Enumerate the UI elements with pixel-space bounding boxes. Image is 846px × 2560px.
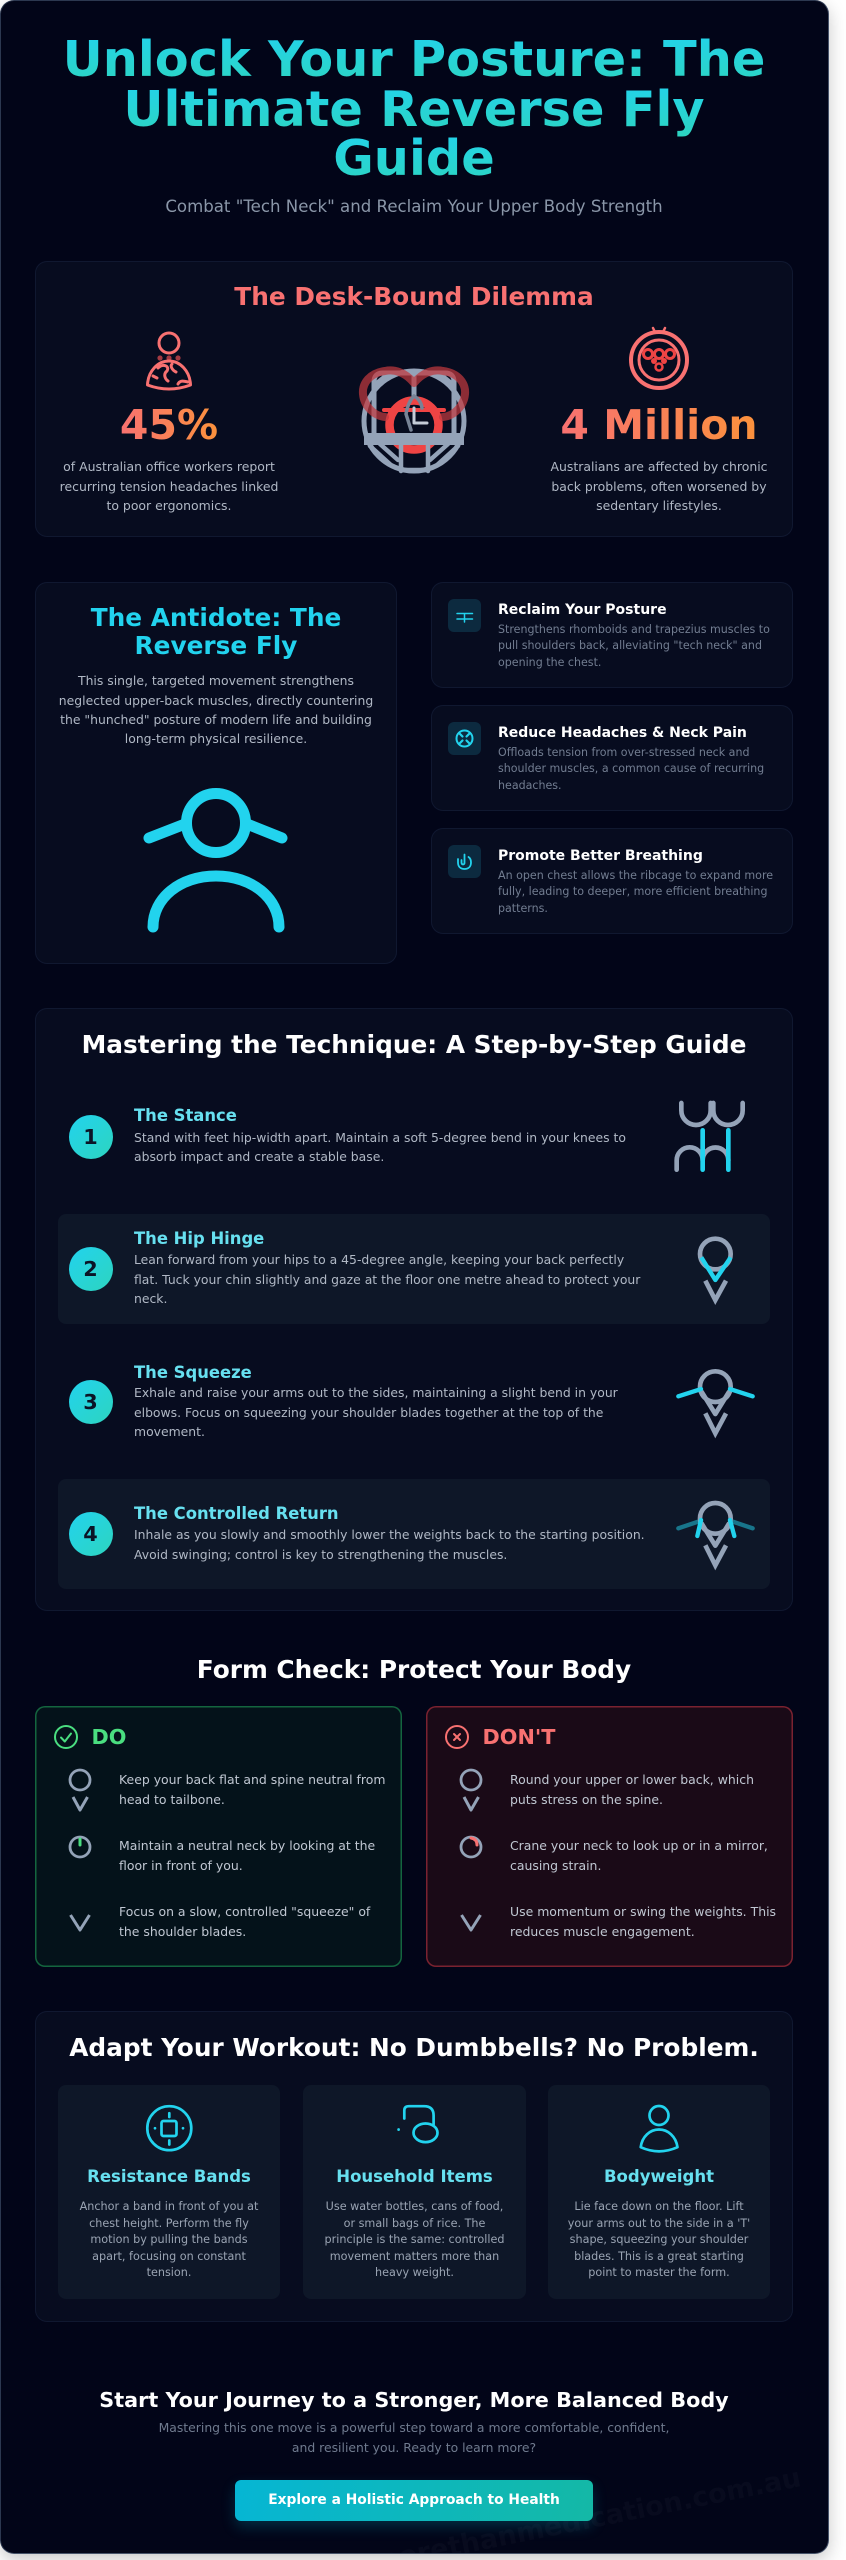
text: headaches: headaches.	[498, 779, 562, 792]
text: breathing: patterns.	[498, 902, 548, 915]
text	[548, 2199, 770, 2282]
number 3	[68, 1380, 112, 1424]
step text 3: movement.	[134, 1424, 205, 1439]
text: Lie face down on the floor. Lift	[574, 2200, 744, 2213]
text: reclaim	[498, 623, 770, 669]
number 3: 3	[83, 1390, 98, 1414]
text	[510, 1902, 776, 1941]
text: Use momentum or swing the weights. This	[510, 1904, 776, 1919]
step text 2: flat. Tuck your chin slightly and gaze at the floor one metre ahead to protect your	[134, 1272, 640, 1287]
title: Household Items	[336, 2167, 493, 2186]
icon: household bottle	[385, 2100, 447, 2160]
text: antidote description: This single, targeted movement strengthens	[78, 673, 354, 688]
number 4: 4	[83, 1522, 98, 1546]
benefit: better breathing	[431, 828, 793, 934]
text: headaches	[498, 746, 764, 792]
text	[510, 1836, 768, 1875]
panel: do	[35, 1706, 402, 1967]
step title 4: The Controlled Return	[134, 1504, 339, 1523]
icon: person	[628, 2100, 690, 2160]
text: head to tailbone.	[119, 1792, 225, 1807]
text: 45% description: to poor ergonomics.	[106, 498, 232, 513]
text: Use water bottles, cans of food,	[326, 2200, 503, 2213]
text	[119, 1838, 375, 1873]
step text 1: Stand with feet hip-width apart. Maintain a soft 5-degree bend in your knees to	[134, 1130, 626, 1145]
do item 3	[69, 1904, 370, 1939]
icon: neutral neck	[68, 1836, 92, 1858]
text: Focus on a slow, controlled "squeeze" of	[119, 1904, 370, 1919]
text: motion by pulling the bands	[90, 2233, 248, 2246]
option: resistance bands	[58, 2084, 280, 2299]
option: bodyweight	[548, 2084, 770, 2299]
step text 3	[134, 1385, 618, 1439]
text: puts stress on the spine.	[510, 1792, 663, 1807]
text: reduces muscle engagement.	[510, 1924, 695, 1939]
text: point to master the form.	[588, 2266, 730, 2279]
icon: squeeze figure	[676, 1369, 755, 1438]
step text 2: neck.	[134, 1291, 167, 1306]
title: Ultimate Reverse Fly	[123, 80, 705, 138]
text: 4 million description: sedentary lifestyles.	[596, 498, 722, 513]
heading: antidote	[90, 603, 341, 660]
icon: tension head	[358, 366, 470, 474]
text	[510, 1772, 754, 1807]
text: headaches: shoulder muscles, a common cause of recurring	[498, 762, 764, 775]
text: chest height. Perform the fly	[89, 2217, 249, 2230]
text: breathing	[498, 869, 773, 915]
text: antidote description: the "hunched" posture of modern life and building	[60, 712, 372, 727]
step 4	[58, 1479, 770, 1589]
text	[58, 2199, 280, 2282]
step text 2: Lean forward from your hips to a 45-degree angle, keeping your back perfectly	[134, 1252, 624, 1267]
text: antidote description: long-term physical resilience.	[125, 731, 307, 746]
text: shape, squeezing your shoulder	[570, 2233, 748, 2246]
heading: adapt: Adapt Your Workout: No Dumbbells? No Problem.	[69, 2033, 759, 2062]
heading: headaches: Reduce Headaches & Neck Pain	[498, 724, 747, 740]
number 1: 1	[83, 1124, 98, 1148]
title: Resistance Bands	[87, 2167, 251, 2186]
text: causing strain.	[510, 1858, 601, 1873]
text: Keep your back flat and spine neutral from	[119, 1772, 385, 1787]
step text 2	[134, 1252, 640, 1306]
icon: chevron	[451, 1900, 491, 1950]
step 3	[69, 1362, 755, 1439]
icon: chevron	[69, 1914, 91, 1932]
text: movement matters more than	[330, 2250, 499, 2263]
icon: compass arrows	[448, 722, 481, 755]
text: tension.	[147, 2266, 191, 2279]
step title 1: The Stance	[134, 1106, 237, 1125]
panel: don't	[426, 1706, 793, 1967]
number: 4 million: 4 Million	[560, 401, 758, 449]
title	[63, 30, 765, 187]
text: Round your upper or lower back, which	[510, 1772, 754, 1787]
panel: adapt your workout	[35, 2011, 793, 2322]
step title 3: The Squeeze	[134, 1362, 252, 1382]
do item 2	[68, 1836, 375, 1873]
icon: check	[54, 1725, 78, 1749]
text: reclaim: opening the chest.	[498, 656, 601, 669]
heading: do: DO	[92, 1725, 126, 1749]
text: 45% description: of Australian office workers report	[63, 459, 275, 474]
text: cta: Mastering this one move is a powerful step toward a more comfortable, confident,	[159, 2420, 669, 2435]
icon: posture lines	[448, 599, 481, 632]
text	[119, 1772, 385, 1807]
icon: head and spine	[68, 1768, 92, 1812]
title: Bodyweight	[604, 2167, 714, 2186]
heading: antidote: The Antidote: The	[91, 603, 341, 632]
benefit: reclaim your posture	[431, 582, 793, 688]
text: or small bags of rice. The	[344, 2217, 485, 2230]
text	[119, 1904, 370, 1939]
step text 4: Avoid swinging; control is key to strengthening the muscles.	[134, 1547, 507, 1562]
heading: form check: Form Check: Protect Your Body	[197, 1654, 631, 1684]
icon: band target	[138, 2100, 200, 2160]
title: Guide	[333, 129, 495, 187]
panel: the desk-bound dilemma	[35, 261, 793, 537]
text	[303, 2199, 526, 2282]
icon: craned neck	[451, 1834, 491, 1884]
heading: technique: Mastering the Technique: A Step-by-Step Guide	[82, 1030, 746, 1059]
icon: head and spine	[460, 1768, 482, 1812]
heading: cta: Start Your Journey to a Stronger, More Balanced Body	[99, 2388, 729, 2412]
don't item 1	[460, 1768, 754, 1812]
heading: don't: DON'T	[482, 1725, 555, 1749]
step text 3: elbows. Focus on squeezing your shoulder blades together at the top of the	[134, 1405, 603, 1420]
option: household items	[303, 2084, 526, 2299]
text: 4 million description: Australians are affected by chronic	[550, 459, 768, 474]
icon: stance legs	[674, 1100, 745, 1172]
icon: cross	[445, 1725, 469, 1749]
number 1	[68, 1114, 112, 1158]
step 1	[69, 1100, 745, 1172]
button	[235, 2480, 593, 2521]
text: Anchor a band in front of you at	[80, 2200, 258, 2213]
stat: 4 million	[550, 326, 768, 513]
text: headaches: Offloads tension from over-stressed neck and	[498, 746, 749, 759]
step 2	[58, 1214, 770, 1324]
text: your arms out to the side in a 'T'	[568, 2217, 750, 2230]
step text 1	[134, 1130, 626, 1164]
heading: dilemma: The Desk-Bound Dilemma	[234, 282, 594, 311]
panel: technique steps	[35, 1008, 793, 1611]
step text 4: Inhale as you slowly and smoothly lower the weights back to the starting position.	[134, 1527, 645, 1542]
text: floor in front of you.	[119, 1858, 243, 1873]
text: apart, focusing on constant	[92, 2250, 246, 2263]
number: 45%: 45%	[120, 401, 218, 449]
text: the shoulder blades.	[119, 1924, 246, 1939]
stat: 45 percent	[60, 332, 278, 513]
button: Explore a Holistic Approach to Health	[268, 2492, 560, 2508]
text: 45% description: recurring tension headaches linked	[60, 479, 278, 494]
do item 1	[68, 1768, 385, 1812]
icon: reverse fly figure	[144, 788, 288, 932]
icon: spine target	[629, 326, 689, 390]
heading: reclaim: Reclaim Your Posture	[498, 602, 667, 618]
title: Unlock Your Posture: The	[63, 30, 765, 88]
call to action	[80, 2380, 748, 2525]
number 4	[68, 1512, 112, 1556]
don't item 2	[451, 1834, 786, 1884]
text: breathing: An open chest allows the ribcage to expand more	[498, 869, 773, 882]
number 2	[68, 1246, 112, 1290]
text: antidote description: neglected upper-back muscles, directly countering	[59, 693, 373, 708]
text: 4 million description	[550, 459, 768, 513]
step title 2: The Hip Hinge	[134, 1229, 264, 1248]
icon: person with tension	[146, 332, 192, 390]
don't item 3	[451, 1900, 786, 1950]
benefit: reduce headaches	[431, 705, 793, 811]
subtitle: Combat "Tech Neck" and Reclaim Your Upper Body Strength	[165, 196, 663, 216]
text: antidote description	[59, 673, 373, 746]
step text 3: Exhale and raise your arms out to the sides, maintaining a slight bend in your	[134, 1385, 618, 1400]
text: 45% description	[60, 459, 278, 513]
text: Maintain a neutral neck by looking at the	[119, 1838, 375, 1853]
text: breathing: fully, leading to deeper, more efficient breathing	[498, 885, 767, 898]
icon: return figure	[676, 1500, 755, 1570]
number 2: 2	[83, 1256, 98, 1280]
text: blades. This is a great starting	[574, 2250, 744, 2263]
text: reclaim: Strengthens rhomboids and trapezius muscles to	[498, 623, 770, 636]
text: principle is the same: controlled	[325, 2233, 504, 2246]
text: reclaim: pull shoulders back, alleviating "tech neck" and	[498, 639, 762, 652]
text: heavy weight.	[375, 2266, 454, 2279]
step text 1: absorb impact and create a stable base.	[134, 1149, 384, 1164]
text: cta: and resilient you. Ready to learn more?	[292, 2440, 536, 2455]
icon: breath hook	[448, 845, 481, 878]
text: cta	[80, 2418, 748, 2457]
step text 4	[134, 1527, 645, 1562]
icon: hinge figure	[698, 1236, 733, 1305]
heading: antidote: Reverse Fly	[135, 631, 297, 660]
heading: breathing: Promote Better Breathing	[498, 848, 703, 864]
text: Crane your neck to look up or in a mirror,	[510, 1838, 768, 1853]
text: 4 million description: back problems, often worsened by	[551, 479, 767, 494]
panel: the antidote	[35, 582, 397, 964]
